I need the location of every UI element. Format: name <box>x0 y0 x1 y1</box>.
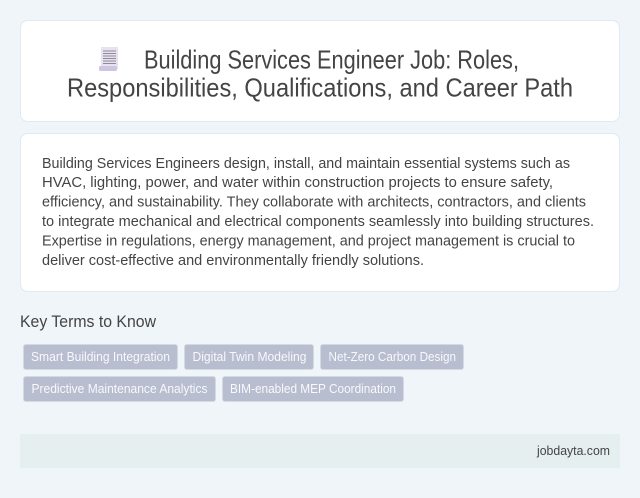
title: Responsibilities, Qualifications, and Career Path <box>67 72 573 102</box>
panel: title card <box>20 20 620 122</box>
title <box>67 44 573 102</box>
tag: Predictive Maintenance Analytics <box>24 376 216 402</box>
tag: Smart Building Integration: Smart Building Integration <box>31 350 170 364</box>
tag: Digital Twin Modeling <box>184 344 314 370</box>
footer bar <box>20 434 620 468</box>
tag: Predictive Maintenance Analytics: Predictive Maintenance Analytics <box>32 382 208 396</box>
tag: Net-Zero Carbon Design <box>320 344 464 370</box>
tag: BIM-enabled MEP Coordination: BIM-enabled MEP Coordination <box>230 382 396 396</box>
description text: deliver cost-effective and environmentally friendly solutions. <box>42 252 424 269</box>
description text <box>42 155 594 269</box>
description text: Expertise in regulations, energy management, and project management is crucial to <box>42 232 575 250</box>
title: Building Services Engineer Job: Roles, <box>144 44 519 74</box>
icon: document scroll <box>99 47 118 71</box>
description text: Building Services Engineers design, install, and maintain essential systems such as <box>42 155 570 172</box>
panel: description card <box>20 134 620 292</box>
tag: Net-Zero Carbon Design: Net-Zero Carbon Design <box>328 350 456 364</box>
tag: Smart Building Integration <box>24 344 178 370</box>
heading: key terms: Key Terms to Know <box>20 313 156 331</box>
description text: efficiency, and sustainability. They collaborate with architects, contractors, and clients <box>42 194 586 210</box>
tag: BIM-enabled MEP Coordination <box>222 376 404 402</box>
description text: HVAC, lighting, power, and water within construction projects to ensure safety, <box>42 174 553 191</box>
footer source text: jobdayta.com <box>536 444 610 458</box>
description text: to integrate mechanical and electrical components seamlessly into building structures. <box>42 213 594 230</box>
tag: Digital Twin Modeling: Digital Twin Modeling <box>192 350 307 364</box>
